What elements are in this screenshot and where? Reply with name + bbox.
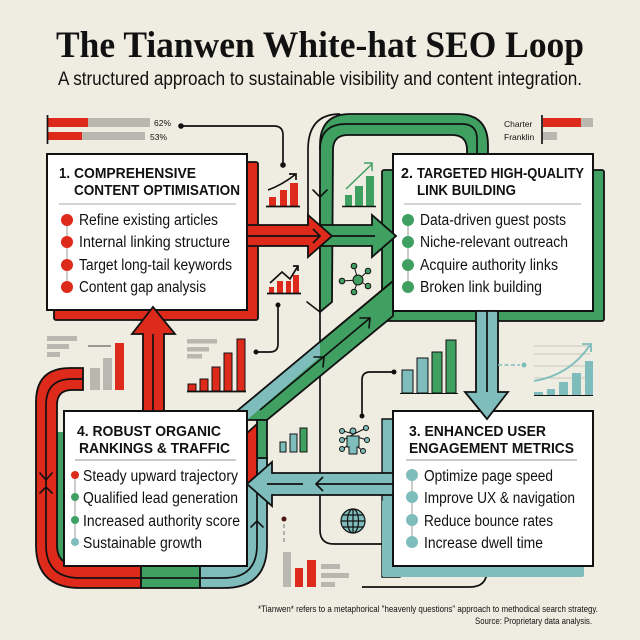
chart: teal growth curve — [498, 344, 593, 396]
panel 2 list: Niche-relevant outreach — [420, 234, 568, 251]
connector: bars to rising chart — [178, 123, 286, 168]
panel 2 list: Broken link building — [420, 279, 542, 296]
panel 3 list: Reduce bounce rates — [424, 513, 553, 530]
chart: small outlined bars — [280, 428, 307, 452]
chart: Charter and Franklin bars: Franklin — [504, 132, 535, 142]
panel 2 heading: TARGETED HIGH-QUALITY — [417, 165, 584, 182]
green loop band — [307, 114, 488, 312]
icon: globe — [341, 509, 365, 533]
panel 4 heading: RANKINGS & TRAFFIC — [79, 440, 230, 457]
panel 4: organic rankings — [64, 411, 247, 566]
footnote: Source: Proprietary data analysis. — [475, 616, 592, 627]
icon: green rising chart — [342, 163, 376, 206]
panel 3 list: Increase dwell time — [424, 535, 543, 552]
diagonal band from panel 4 to panel 2 — [237, 281, 393, 420]
title: The Tianwen White-hat SEO Loop — [56, 25, 584, 66]
chart: Charter and Franklin bars — [504, 115, 593, 144]
panel 2 heading: LINK BUILDING — [417, 182, 516, 199]
panel 4 heading: 4. ROBUST ORGANIC — [77, 423, 221, 440]
teal shadow base — [382, 500, 584, 577]
red shadow behind panel 1 — [54, 162, 258, 320]
chart: 62% and 53% bars: 62% — [154, 118, 171, 128]
panel 4 list: Steady upward trajectory — [83, 468, 238, 485]
panel 1 list: Content gap analysis — [79, 279, 206, 296]
marker: dashed dot — [282, 516, 286, 542]
panel 1: content optimisation — [47, 154, 247, 310]
chart: Charter and Franklin bars: Charter — [504, 119, 533, 129]
panel 3 list: Improve UX & navigation — [424, 490, 575, 507]
arrow: teal left into panel 4 — [247, 462, 393, 506]
chart: centre-left red bars — [187, 339, 246, 392]
chart: left grey and red bars — [47, 336, 124, 390]
connector: bars to person icon — [360, 370, 396, 418]
panel 1 list — [61, 212, 232, 296]
thin connector line: bottom right — [362, 565, 487, 587]
panel 1 heading: CONTENT OPTIMISATION — [74, 182, 240, 199]
icon: person with nodes — [340, 426, 370, 454]
arrow: green into panel 2 — [320, 215, 396, 257]
icon: red rising chart — [266, 174, 300, 206]
subtitle: A structured approach to sustainable visibility and content integration. — [58, 69, 582, 90]
panel 1 list: Refine existing articles — [79, 212, 218, 229]
chart: 62% and 53% bars — [48, 115, 171, 144]
teal shadow behind panel 3 — [382, 419, 400, 577]
panel 4 list: Increased authority score — [83, 513, 240, 530]
panel 4 list: Qualified lead generation — [83, 490, 238, 507]
footnote — [258, 604, 598, 627]
panel 3 list — [406, 468, 575, 552]
thin connector line: centre spine — [308, 114, 383, 544]
panel 1 heading: 1. — [59, 165, 70, 182]
panel 1 list: Internal linking structure — [79, 234, 230, 251]
panel 2 list: Acquire authority links — [420, 257, 558, 274]
panel 1 heading: COMPREHENSIVE — [74, 165, 196, 182]
panel 2 heading: 2. — [401, 165, 413, 182]
outer loop band around panel 4 — [36, 368, 267, 588]
panel 4 list — [71, 468, 240, 552]
connector: chart to bar chart — [254, 302, 280, 354]
panel 3: engagement metrics — [393, 411, 593, 566]
chart: bottom bars and legend — [283, 552, 349, 587]
green shadow behind panel 2 — [382, 170, 604, 321]
panel 3 list: Optimize page speed — [424, 468, 553, 485]
panel 3 heading: ENGAGEMENT METRICS — [409, 440, 574, 457]
panel 4 heading — [77, 423, 230, 457]
panel 2 heading — [401, 165, 584, 199]
icon: network nodes — [339, 263, 371, 295]
panel 3 heading: 3. ENHANCED USER — [409, 423, 546, 440]
panel 4 list: Sustainable growth — [83, 535, 202, 552]
arrow: red from panel 1 — [247, 215, 332, 257]
panel 1 list: Target long-tail keywords — [79, 257, 232, 274]
chart: 62% and 53% bars: 53% — [150, 132, 167, 142]
chart: teal and green bars — [400, 340, 458, 394]
arrow: teal down into panel 3 — [465, 311, 508, 419]
icon: red line and bar chart — [267, 266, 301, 294]
panel 1 heading — [59, 165, 240, 199]
panel 2 list: Data-driven guest posts — [420, 212, 566, 229]
panel 3 heading — [409, 423, 574, 457]
panel 2 list — [402, 212, 568, 296]
panel 2: link building — [393, 154, 593, 311]
arrow: red up into panel 1 — [132, 307, 175, 411]
